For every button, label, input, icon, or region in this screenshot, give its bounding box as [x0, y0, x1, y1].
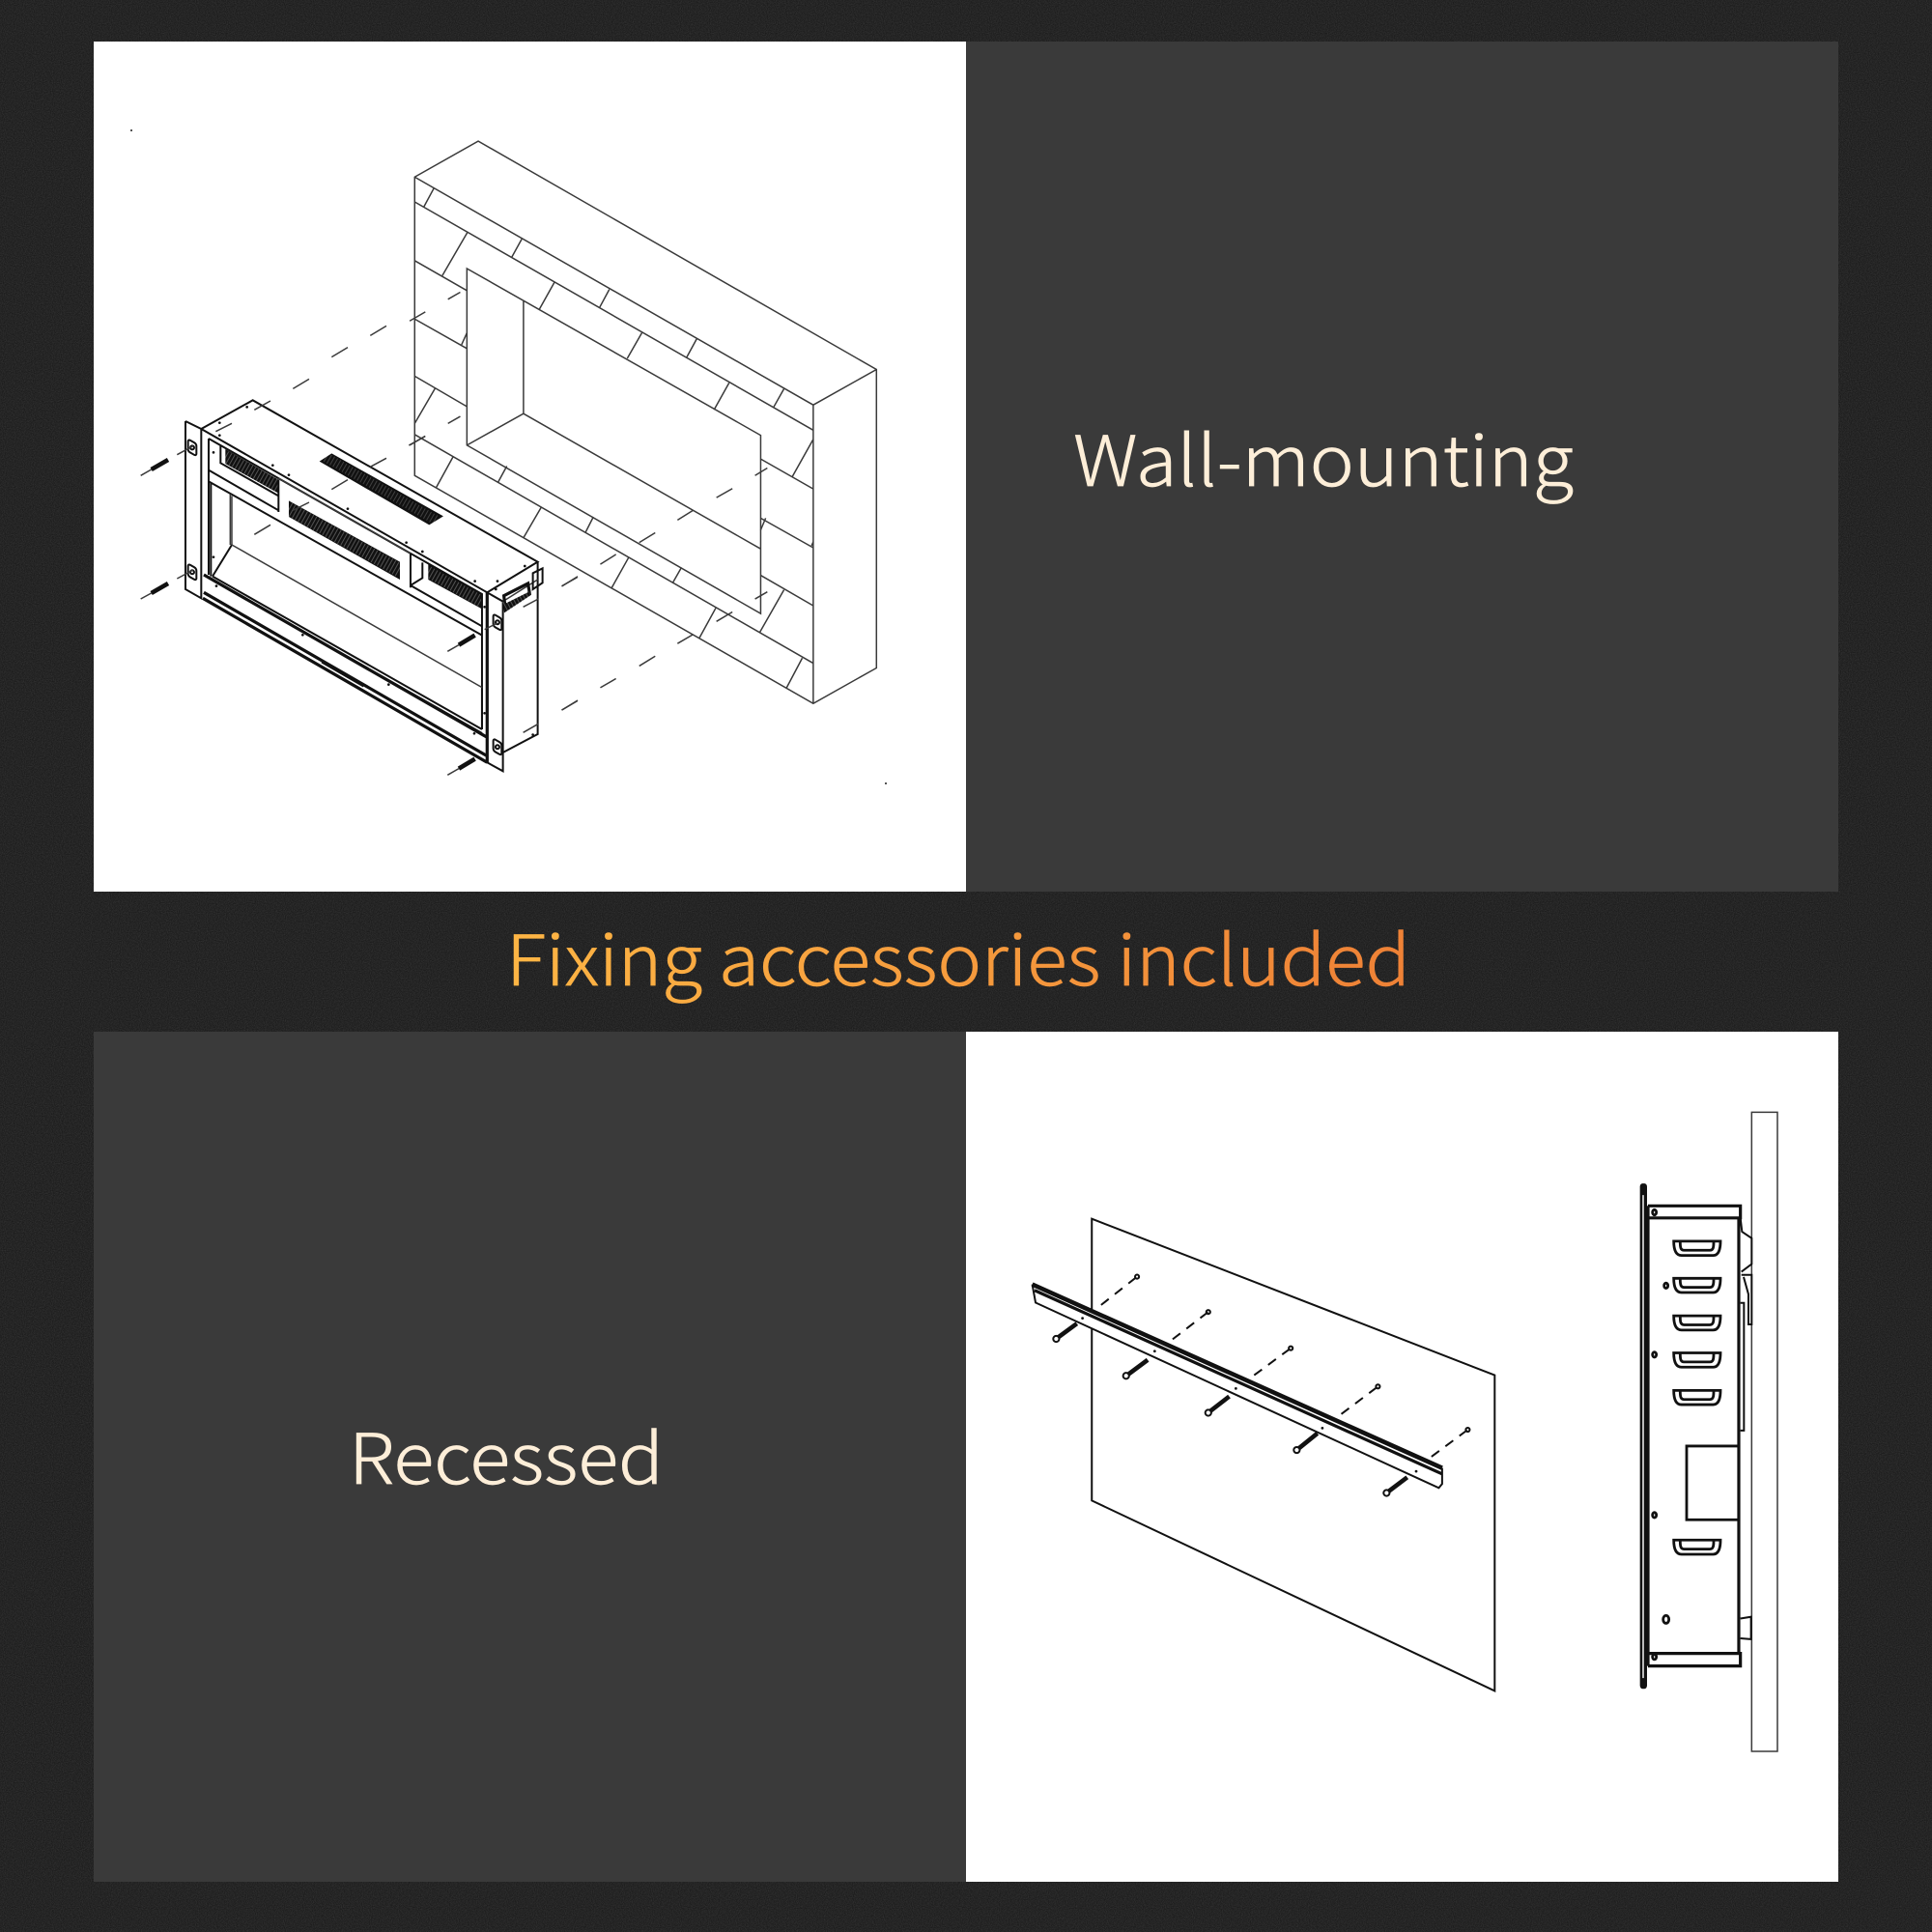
body: [1648, 1206, 1741, 1666]
louvres: [225, 449, 481, 609]
label: Recessed: Recessed: [349, 1403, 664, 1504]
heading: Fixing accessories included: [506, 904, 1410, 1006]
mounting holes: [188, 439, 501, 755]
panel: wall-mounting diagram: [94, 42, 966, 892]
vent slots: [1653, 1209, 1720, 1660]
front flange: [1640, 1183, 1647, 1689]
label: Wall-mounting: Wall-mounting: [1073, 405, 1574, 506]
rail screws: [1053, 1275, 1469, 1496]
icon: electric fireplace insert: [141, 326, 578, 775]
handle and bracket: [504, 568, 543, 611]
icon: brick wall with recess: [414, 141, 876, 703]
dashed guide lines: [410, 292, 767, 732]
panel: recessed diagram: [966, 1032, 1838, 1882]
wall section: [1751, 1112, 1777, 1751]
screw dots: [213, 406, 534, 736]
icon: wall plate with mounting rail: [1033, 1219, 1494, 1690]
rear brackets: [1741, 1218, 1751, 1639]
casing outlines: [185, 400, 538, 771]
screws and guides: [141, 326, 578, 775]
panel: recessed label: [94, 1032, 966, 1882]
specks: [130, 129, 887, 784]
icon: side view of recessed fireplace: [1640, 1112, 1777, 1751]
panel: wall-mounting label: [966, 42, 1838, 892]
